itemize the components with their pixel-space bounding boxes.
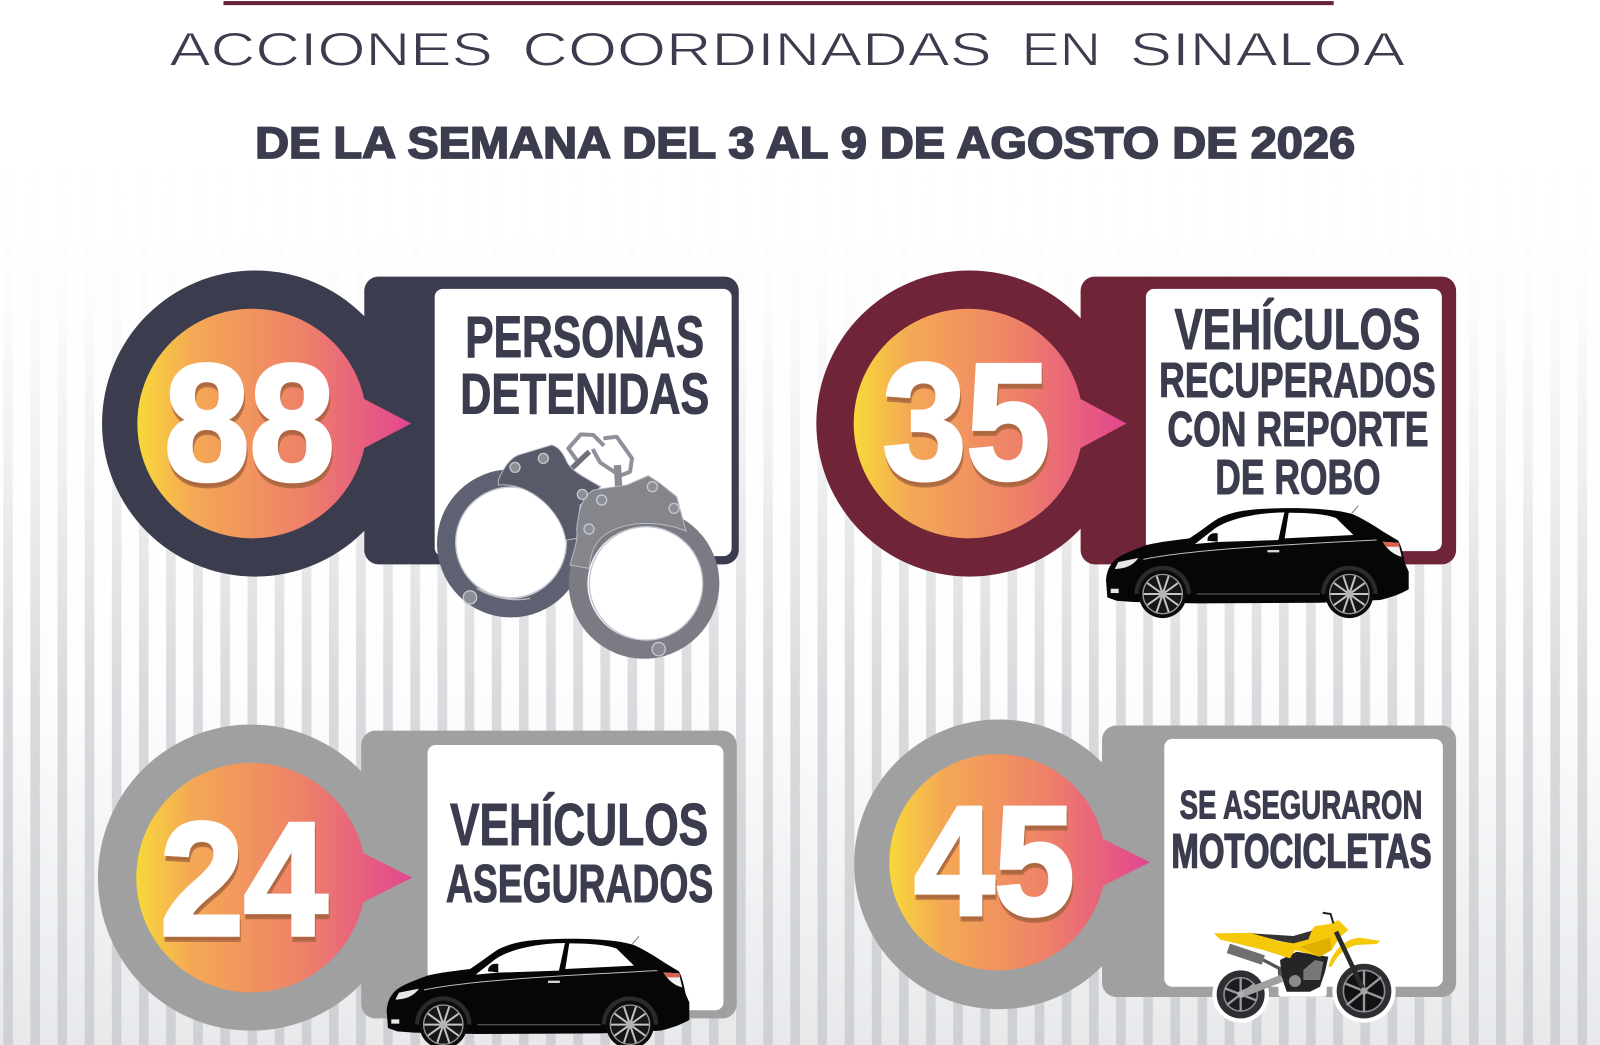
number 35: 35 (884, 335, 1051, 520)
number 45: 45 (915, 779, 1076, 952)
number circle (854, 719, 1144, 1009)
background: striped fade (0, 368, 1600, 1045)
label text: SE ASEGURARON (1180, 783, 1422, 827)
number 88: 88 (164, 331, 335, 516)
label text: RECUPERADOS (1159, 354, 1436, 408)
label card frame (361, 731, 737, 1018)
icon: handcuffs (446, 434, 710, 656)
number 35: 35 (883, 330, 1050, 515)
label text: MOTOCICLETAS (1171, 825, 1432, 878)
label text (1159, 298, 1436, 505)
label text: ASEGURADOS (446, 854, 713, 914)
label card interior (435, 289, 732, 556)
label text: CON REPORTE (1167, 403, 1429, 457)
panel: vehiculos asegurados (98, 725, 737, 1045)
number 45: 45 (914, 774, 1074, 947)
icon: black car (1106, 506, 1409, 618)
gradient speech bubble (136, 763, 412, 992)
label card frame (1081, 277, 1456, 564)
title: EN (1021, 23, 1101, 75)
title: COORDINADAS (522, 23, 992, 75)
label text (1171, 783, 1432, 878)
gradient speech bubble (854, 309, 1127, 538)
label card frame (364, 277, 739, 564)
label card interior (1146, 289, 1442, 551)
title: ACCIONES (169, 23, 493, 75)
top rule (223, 1, 1334, 5)
number 24: 24 (160, 790, 328, 970)
title: SINALOA (1130, 23, 1406, 75)
label text: VEHÍCULOS (450, 791, 708, 858)
label text (446, 791, 713, 914)
gradient speech bubble (137, 309, 411, 538)
subtitle: date range: DE LA SEMANA DEL 3 AL 9 DE AGOSTO DE 2026 (255, 117, 1355, 168)
icon: black car (387, 936, 689, 1045)
label text: DETENIDAS (460, 362, 709, 426)
panel: vehiculos recuperados (816, 270, 1456, 618)
panel: personas detenidas (102, 270, 739, 656)
label card interior (428, 745, 723, 1010)
number 88: 88 (165, 336, 336, 521)
title (169, 23, 1406, 75)
number circle (98, 725, 404, 1031)
icon: yellow motorcycle (1212, 913, 1396, 1023)
panel: motocicletas (854, 719, 1456, 1023)
label card frame (1102, 726, 1456, 997)
label text: VEHÍCULOS (1174, 298, 1420, 362)
number 24: 24 (161, 795, 329, 975)
label text (460, 305, 709, 426)
label text: PERSONAS (465, 305, 704, 370)
label card interior (1164, 739, 1443, 987)
number circle (102, 270, 408, 577)
label text: DE ROBO (1215, 451, 1381, 505)
gradient speech bubble (889, 754, 1150, 970)
number circle (816, 270, 1122, 577)
